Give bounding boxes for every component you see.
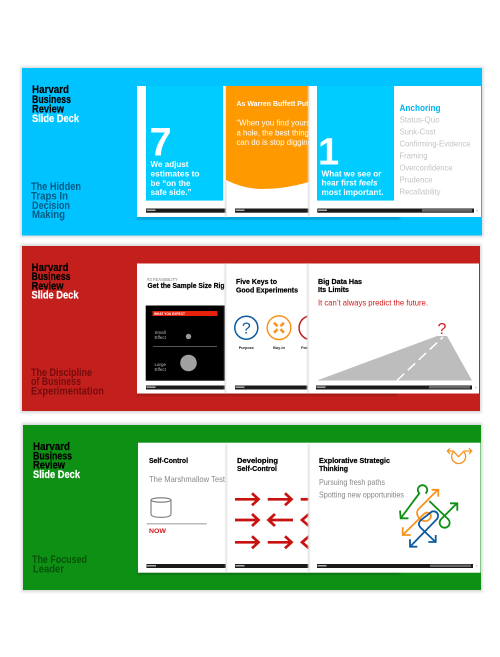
heading: Harvard Business Review Slide Deck: Slide Deck	[32, 113, 80, 125]
slide: developing self-control	[226, 443, 309, 573]
slide: Anchoring: most important.	[322, 187, 384, 197]
slide: five keys	[224, 264, 308, 394]
slide: self-control	[138, 443, 226, 573]
heading: Harvard Business Review Slide Deck: Harvard	[32, 262, 68, 274]
slide: 7 estimates: safe side.”	[150, 187, 192, 197]
slide: Anchoring: 1	[318, 132, 339, 174]
slide: explorative strategic thinking	[308, 443, 480, 573]
slide: sample size: #3 FEASIBILITY	[147, 277, 178, 282]
deck title: of Business	[31, 376, 81, 388]
slide: sample size: Small	[154, 330, 166, 335]
deck title: The Hidden	[31, 181, 81, 193]
heading: Harvard Business Review Slide Deck: Harvard	[33, 441, 70, 453]
slide: big data limits: It can’t always predict the future.	[318, 298, 428, 308]
icon: feasibility (cropped): Fea	[301, 346, 308, 350]
slide: 7 estimates	[137, 86, 226, 217]
slide: developing self-control: Developing	[237, 456, 278, 465]
slide shadow	[137, 393, 397, 396]
slide: self-control: The Marshmallow Test	[149, 474, 226, 484]
slide: Anchoring: What we see or	[322, 168, 382, 178]
heading: Harvard Business Review Slide Deck: Business	[33, 450, 72, 462]
slide: 7 estimates: We adjust	[150, 159, 189, 169]
heading: Harvard Business Review Slide Deck: Slide Deck	[33, 469, 81, 481]
deck title: Leader	[33, 564, 65, 576]
deck title	[32, 554, 87, 576]
heading: Harvard Business Review Slide Deck	[33, 441, 81, 481]
slide: developing self-control: Self-Control	[237, 464, 277, 473]
icon: purpose: Purpose	[239, 346, 254, 350]
slide: Warren Buffett quote: As Warren Buffett Put	[236, 101, 309, 108]
slide: big data limits: Its Limits	[318, 285, 349, 294]
icon: marshmallow	[151, 498, 171, 517]
slide: sample size: Get the Sample Size Rig	[148, 281, 225, 290]
slide: Warren Buffett quote: can do is stop digging	[236, 138, 312, 147]
icon: purpose	[235, 316, 258, 350]
slide: sample size: Effect	[154, 367, 167, 372]
slide: Warren Buffett quote: “When you find yours	[236, 119, 310, 128]
slide: Anchoring: Recallability	[400, 186, 441, 196]
heading: Harvard Business Review Slide Deck: Slide Deck	[32, 290, 79, 302]
slide: Anchoring: Confirming-Evidence	[400, 138, 471, 148]
slide: Anchoring: hear first feels	[322, 178, 378, 188]
slide: 7 estimates: estimates to	[150, 168, 200, 178]
slide: explorative strategic thinking: Explorative Strategic	[319, 456, 390, 465]
slide: big data limits	[307, 264, 479, 394]
slide: explorative strategic thinking: Thinking	[319, 464, 348, 473]
slide: Anchoring: Framing	[400, 150, 428, 160]
heading: Harvard Business Review Slide Deck: Business	[32, 271, 70, 283]
slide: Anchoring: Prudence	[400, 174, 433, 184]
slide: Anchoring: Sunk-Cost	[400, 126, 436, 136]
deck title: The Focused	[32, 554, 87, 566]
heading: Harvard Business Review Slide Deck: Review	[32, 280, 64, 292]
panel: The Focused Leader	[22, 423, 482, 592]
panel: Discipline of Business Experimentation	[20, 244, 482, 413]
slide: sample size: Effect	[154, 335, 167, 340]
slide: five keys: Five Keys to	[236, 277, 277, 286]
slide shadow	[138, 572, 400, 574]
slide: explorative strategic thinking: Spotting new opportunities	[319, 490, 404, 500]
heading: Harvard Business Review Slide Deck	[32, 262, 79, 302]
icon: red arrows	[235, 493, 309, 548]
slide: Anchoring	[308, 86, 481, 217]
icon: purpose: ?	[242, 320, 251, 338]
deck title: Decision	[32, 200, 70, 212]
slide: Anchoring: Overconfidence	[400, 162, 453, 172]
slide: Warren Buffett quote: a hole, the best thing	[236, 128, 309, 138]
heading: Harvard Business Review Slide Deck: Harvard	[32, 84, 69, 96]
slide: sample size	[137, 264, 226, 394]
deck title	[31, 367, 104, 398]
deck title	[31, 181, 81, 221]
heading: Harvard Business Review Slide Deck: Review	[33, 460, 65, 472]
heading: Harvard Business Review Slide Deck: Business	[32, 94, 71, 106]
deck title: Making	[32, 209, 65, 221]
icon: buy-in: Buy-In	[273, 346, 286, 350]
slide shadow	[137, 216, 400, 220]
panel: Hidden Traps In Decision Making	[20, 66, 484, 237]
slide: sample size: WHAT YOU EXPECT	[154, 312, 186, 316]
illustration: road to question mark	[317, 321, 472, 380]
slide: 7 estimates: be “on the	[150, 178, 191, 188]
deck title: Experimentation	[31, 386, 104, 398]
illustration: interlinked arrows	[400, 485, 457, 547]
slide: 7 estimates: 7	[150, 120, 172, 164]
heading: Harvard Business Review Slide Deck: Review	[32, 104, 64, 116]
deck title: Traps In	[31, 190, 68, 202]
slide: five keys: Good Experiments	[236, 285, 298, 294]
slide: self-control: NOW	[149, 528, 167, 535]
slide: Anchoring: Anchoring	[400, 103, 440, 113]
deck title: The Discipline	[31, 367, 92, 379]
slide: Anchoring: Status-Quo	[400, 114, 440, 124]
heading: Harvard Business Review Slide Deck	[32, 84, 80, 125]
illustration: road to question mark: ?	[438, 321, 447, 338]
slide: Warren Buffett quote	[225, 86, 312, 217]
slide: sample size: Large	[154, 362, 167, 367]
slide: self-control: Self-Control	[149, 456, 188, 465]
slide: explorative strategic thinking: Pursuing fresh paths	[319, 478, 385, 487]
icon: orange bull logo	[447, 448, 472, 464]
slide: big data limits: Big Data Has	[318, 277, 362, 286]
